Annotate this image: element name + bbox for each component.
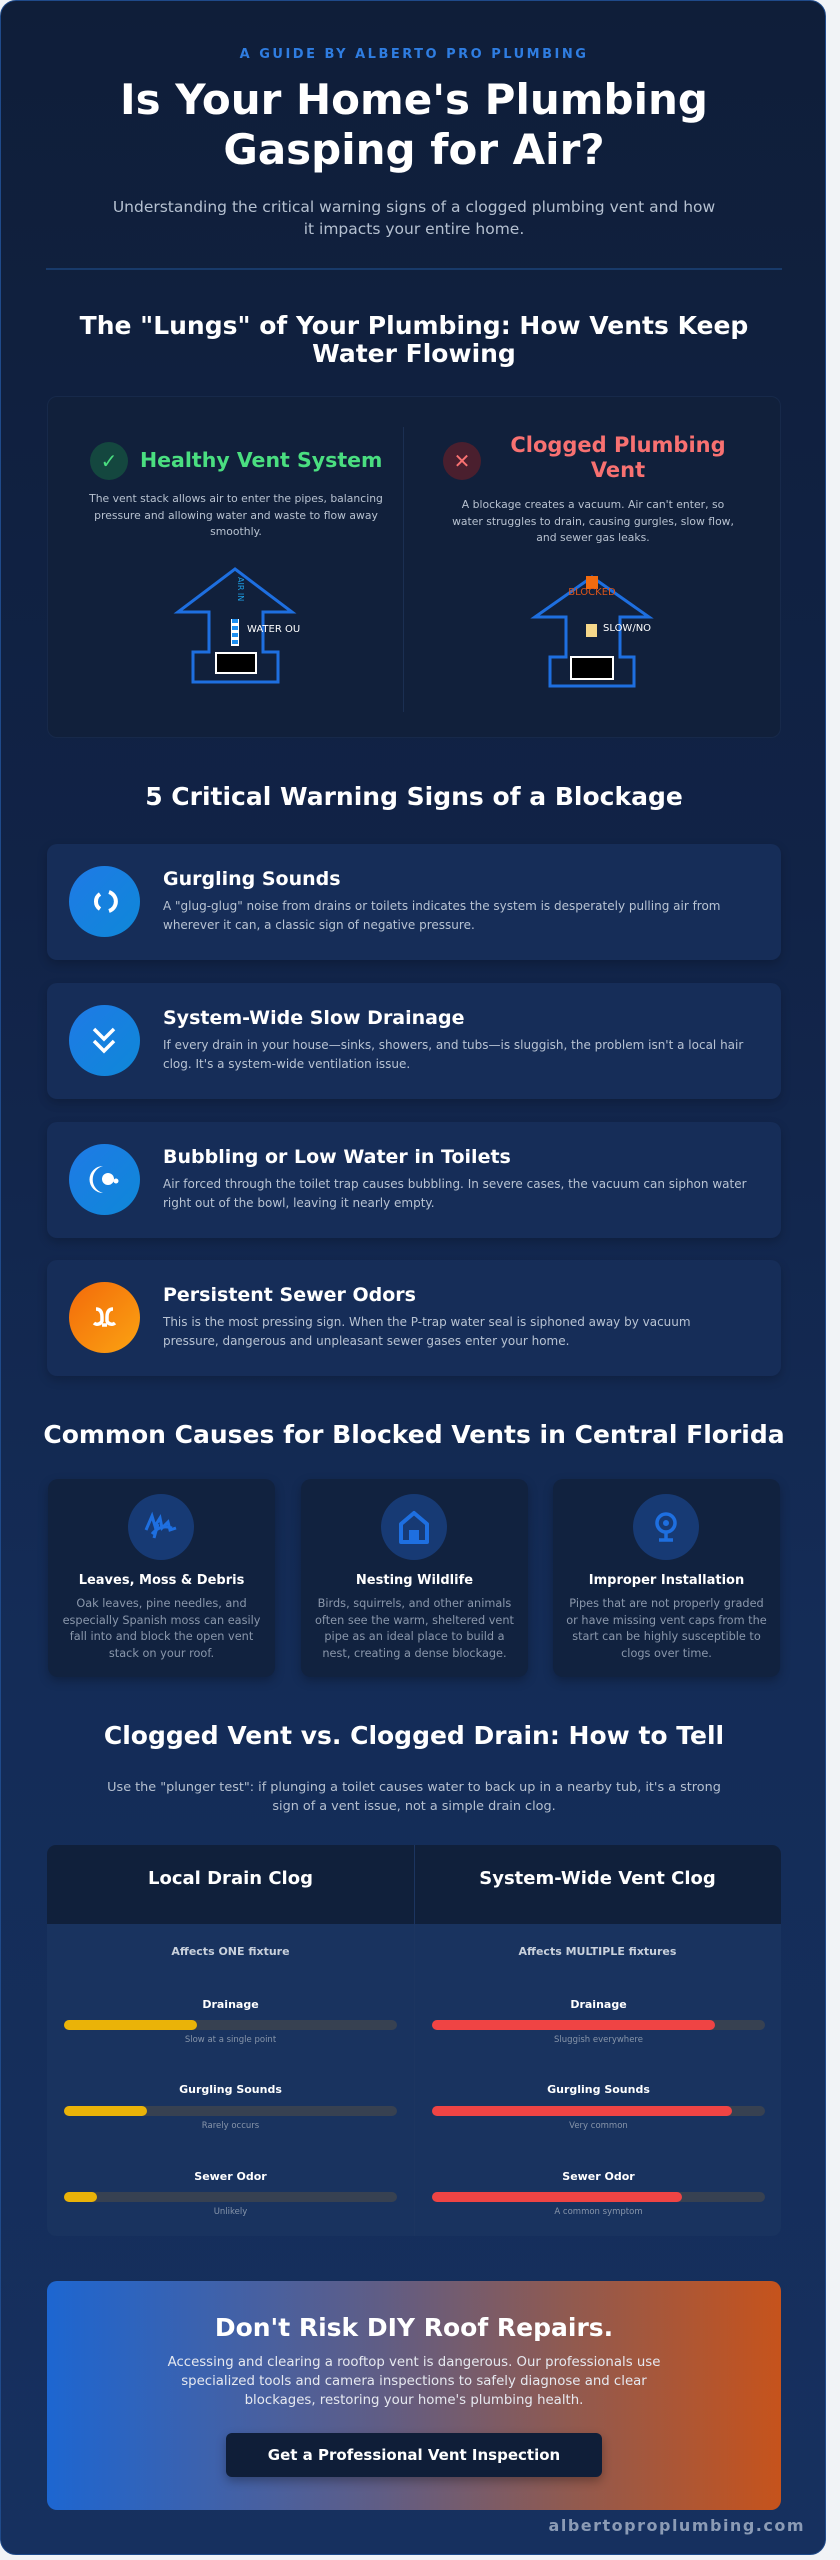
column: vent: Gurgling Sounds — [547, 2083, 650, 2096]
cause: leaves: Leaves, Moss & Debris — [79, 1573, 244, 1588]
tagline: A GUIDE BY ALBERTO PRO PLUMBING — [240, 47, 588, 62]
cause: installation: Pipes that are not properly graded or have missing vent caps from the start can be highly susceptible to clogs over time. — [566, 1597, 767, 1660]
cause: wildlife — [301, 1479, 528, 1677]
card: odors: Persistent Sewer Odors — [163, 1284, 416, 1306]
card: gurgling — [47, 844, 781, 960]
cause: installation: Improper Installation — [589, 1573, 744, 1588]
diagram: clogged — [530, 575, 654, 688]
healthy desc: The vent stack allows air to enter the pipes, balancing pressure and allowing water and waste to flow away smoothly. — [89, 492, 383, 538]
footer url: albertoproplumbing.com — [549, 2516, 805, 2535]
cause: leaves: Oak leaves, pine needles, and especially Spanish moss can easily fall into and block the open vent stack on your roof. — [63, 1597, 260, 1660]
diagram: healthy — [174, 567, 300, 684]
icon: check: ✓ — [101, 449, 117, 473]
column: local: Slow at a single point — [185, 2035, 276, 2045]
column: vent — [432, 1868, 765, 2217]
healthy heading: Healthy Vent System — [140, 448, 382, 472]
plunger test text: Use the "plunger test": if plunging a toilet causes water to back up in a nearby tub, it's a strong sign of a vent issue, not a simple drain clog. — [107, 1780, 721, 1814]
icon: camera — [633, 1494, 699, 1560]
card: odors — [47, 1260, 781, 1376]
column: local: Local Drain Clog — [148, 1868, 313, 1889]
icon: x — [443, 442, 481, 480]
panel: vent comparison — [47, 396, 781, 738]
card: slow drainage: System-Wide Slow Drainage — [163, 1007, 464, 1029]
icon: bubble — [69, 1144, 140, 1215]
heading: vent vs drain: Clogged Vent vs. Clogged Drain: How to Tell — [104, 1721, 724, 1750]
column: local: Affects ONE fixture — [171, 1945, 290, 1958]
icon: gurgle — [69, 866, 140, 937]
cause: wildlife: Birds, squirrels, and other animals often see the warm, sheltered vent pipe as an ideal place to build a nest, creating a dense blockage. — [315, 1597, 514, 1660]
card: gurgling: Gurgling Sounds — [163, 868, 341, 890]
clogged heading: Clogged Plumbing Vent — [510, 433, 726, 482]
cause: installation — [553, 1479, 780, 1677]
card: odors: This is the most pressing sign. When the P-trap water seal is siphoned away by vacuum pressure, dangerous and unpleasant sewer gases enter your home. — [163, 1315, 691, 1348]
card: slow drainage: If every drain in your house—sinks, showers, and tubs—is sluggish, the problem isn't a local hair clog. It's a system-wide ventilation issue. — [163, 1038, 743, 1071]
title — [120, 75, 708, 174]
column: vent: Sluggish everywhere — [554, 2035, 643, 2045]
column: local: Rarely occurs — [202, 2121, 259, 2131]
column: vent: Sewer Odor — [562, 2170, 635, 2183]
column: vent: Drainage — [570, 1998, 627, 2011]
subtitle: Understanding the critical warning signs of a clogged plumbing vent and how it impacts your entire home. — [113, 198, 715, 238]
column: local: Drainage — [202, 1998, 259, 2011]
column: vent: Affects MULTIPLE fixtures — [519, 1945, 676, 1958]
column: vent: Very common — [569, 2121, 628, 2131]
diagram: clogged: BLOCKED — [568, 587, 616, 598]
icon: leaves — [128, 1494, 194, 1560]
CTA panel — [47, 2281, 781, 2510]
column: local — [64, 1868, 397, 2217]
column: local: Gurgling Sounds — [179, 2083, 282, 2096]
heading: warning signs: 5 Critical Warning Signs of a Blockage — [145, 782, 683, 811]
clogged desc: A blockage creates a vacuum. Air can't enter, so water struggles to drain, causing gurgles, slow flow, and sewer gas leaks. — [452, 498, 734, 544]
icon: x: ✕ — [454, 449, 470, 473]
card: toilets: Air forced through the toilet trap causes bubbling. In severe cases, the vacuum can siphon water right out of the bowl, leaving it nearly empty. — [163, 1177, 747, 1210]
diagram: healthy: AIR IN — [236, 577, 245, 601]
title: Is Your Home's Plumbing — [120, 75, 708, 124]
icon: odor — [69, 1282, 140, 1353]
card: toilets — [47, 1122, 781, 1238]
icon: house — [381, 1494, 447, 1560]
diagram: clogged: SLOW/NO — [603, 623, 651, 634]
card: slow drainage — [47, 983, 781, 1099]
card: toilets: Bubbling or Low Water in Toilets — [163, 1146, 511, 1168]
comparison table — [47, 1845, 781, 2236]
icon: check — [90, 442, 128, 480]
cause: leaves — [48, 1479, 275, 1677]
column: vent: A common symptom — [554, 2207, 643, 2217]
CTA button — [226, 2433, 602, 2477]
CTA text: Accessing and clearing a rooftop vent is dangerous. Our professionals use specialized tools and camera inspections to safely diagnose and clear blockages, restoring your home's plumbing health. — [168, 2355, 660, 2408]
CTA button: Get a Professional Vent Inspection — [268, 2446, 560, 2464]
card: gurgling: A "glug-glug" noise from drains or toilets indicates the system is desperately pulling air from wherever it can, a classic sign of negative pressure. — [163, 899, 720, 932]
icon: chevrons — [69, 1005, 140, 1076]
cause: wildlife: Nesting Wildlife — [356, 1573, 473, 1588]
column: local: Sewer Odor — [194, 2170, 267, 2183]
CTA title: Don't Risk DIY Roof Repairs. — [215, 2313, 613, 2342]
diagram: healthy: WATER OU — [247, 624, 300, 635]
heading: lungs: The "Lungs" of Your Plumbing: How Vents Keep Water Flowing — [80, 311, 748, 368]
heading: causes: Common Causes for Blocked Vents in Central Florida — [43, 1420, 785, 1449]
column: vent: System-Wide Vent Clog — [479, 1868, 716, 1889]
title: Gasping for Air? — [223, 125, 605, 174]
column: local: Unlikely — [214, 2207, 247, 2217]
